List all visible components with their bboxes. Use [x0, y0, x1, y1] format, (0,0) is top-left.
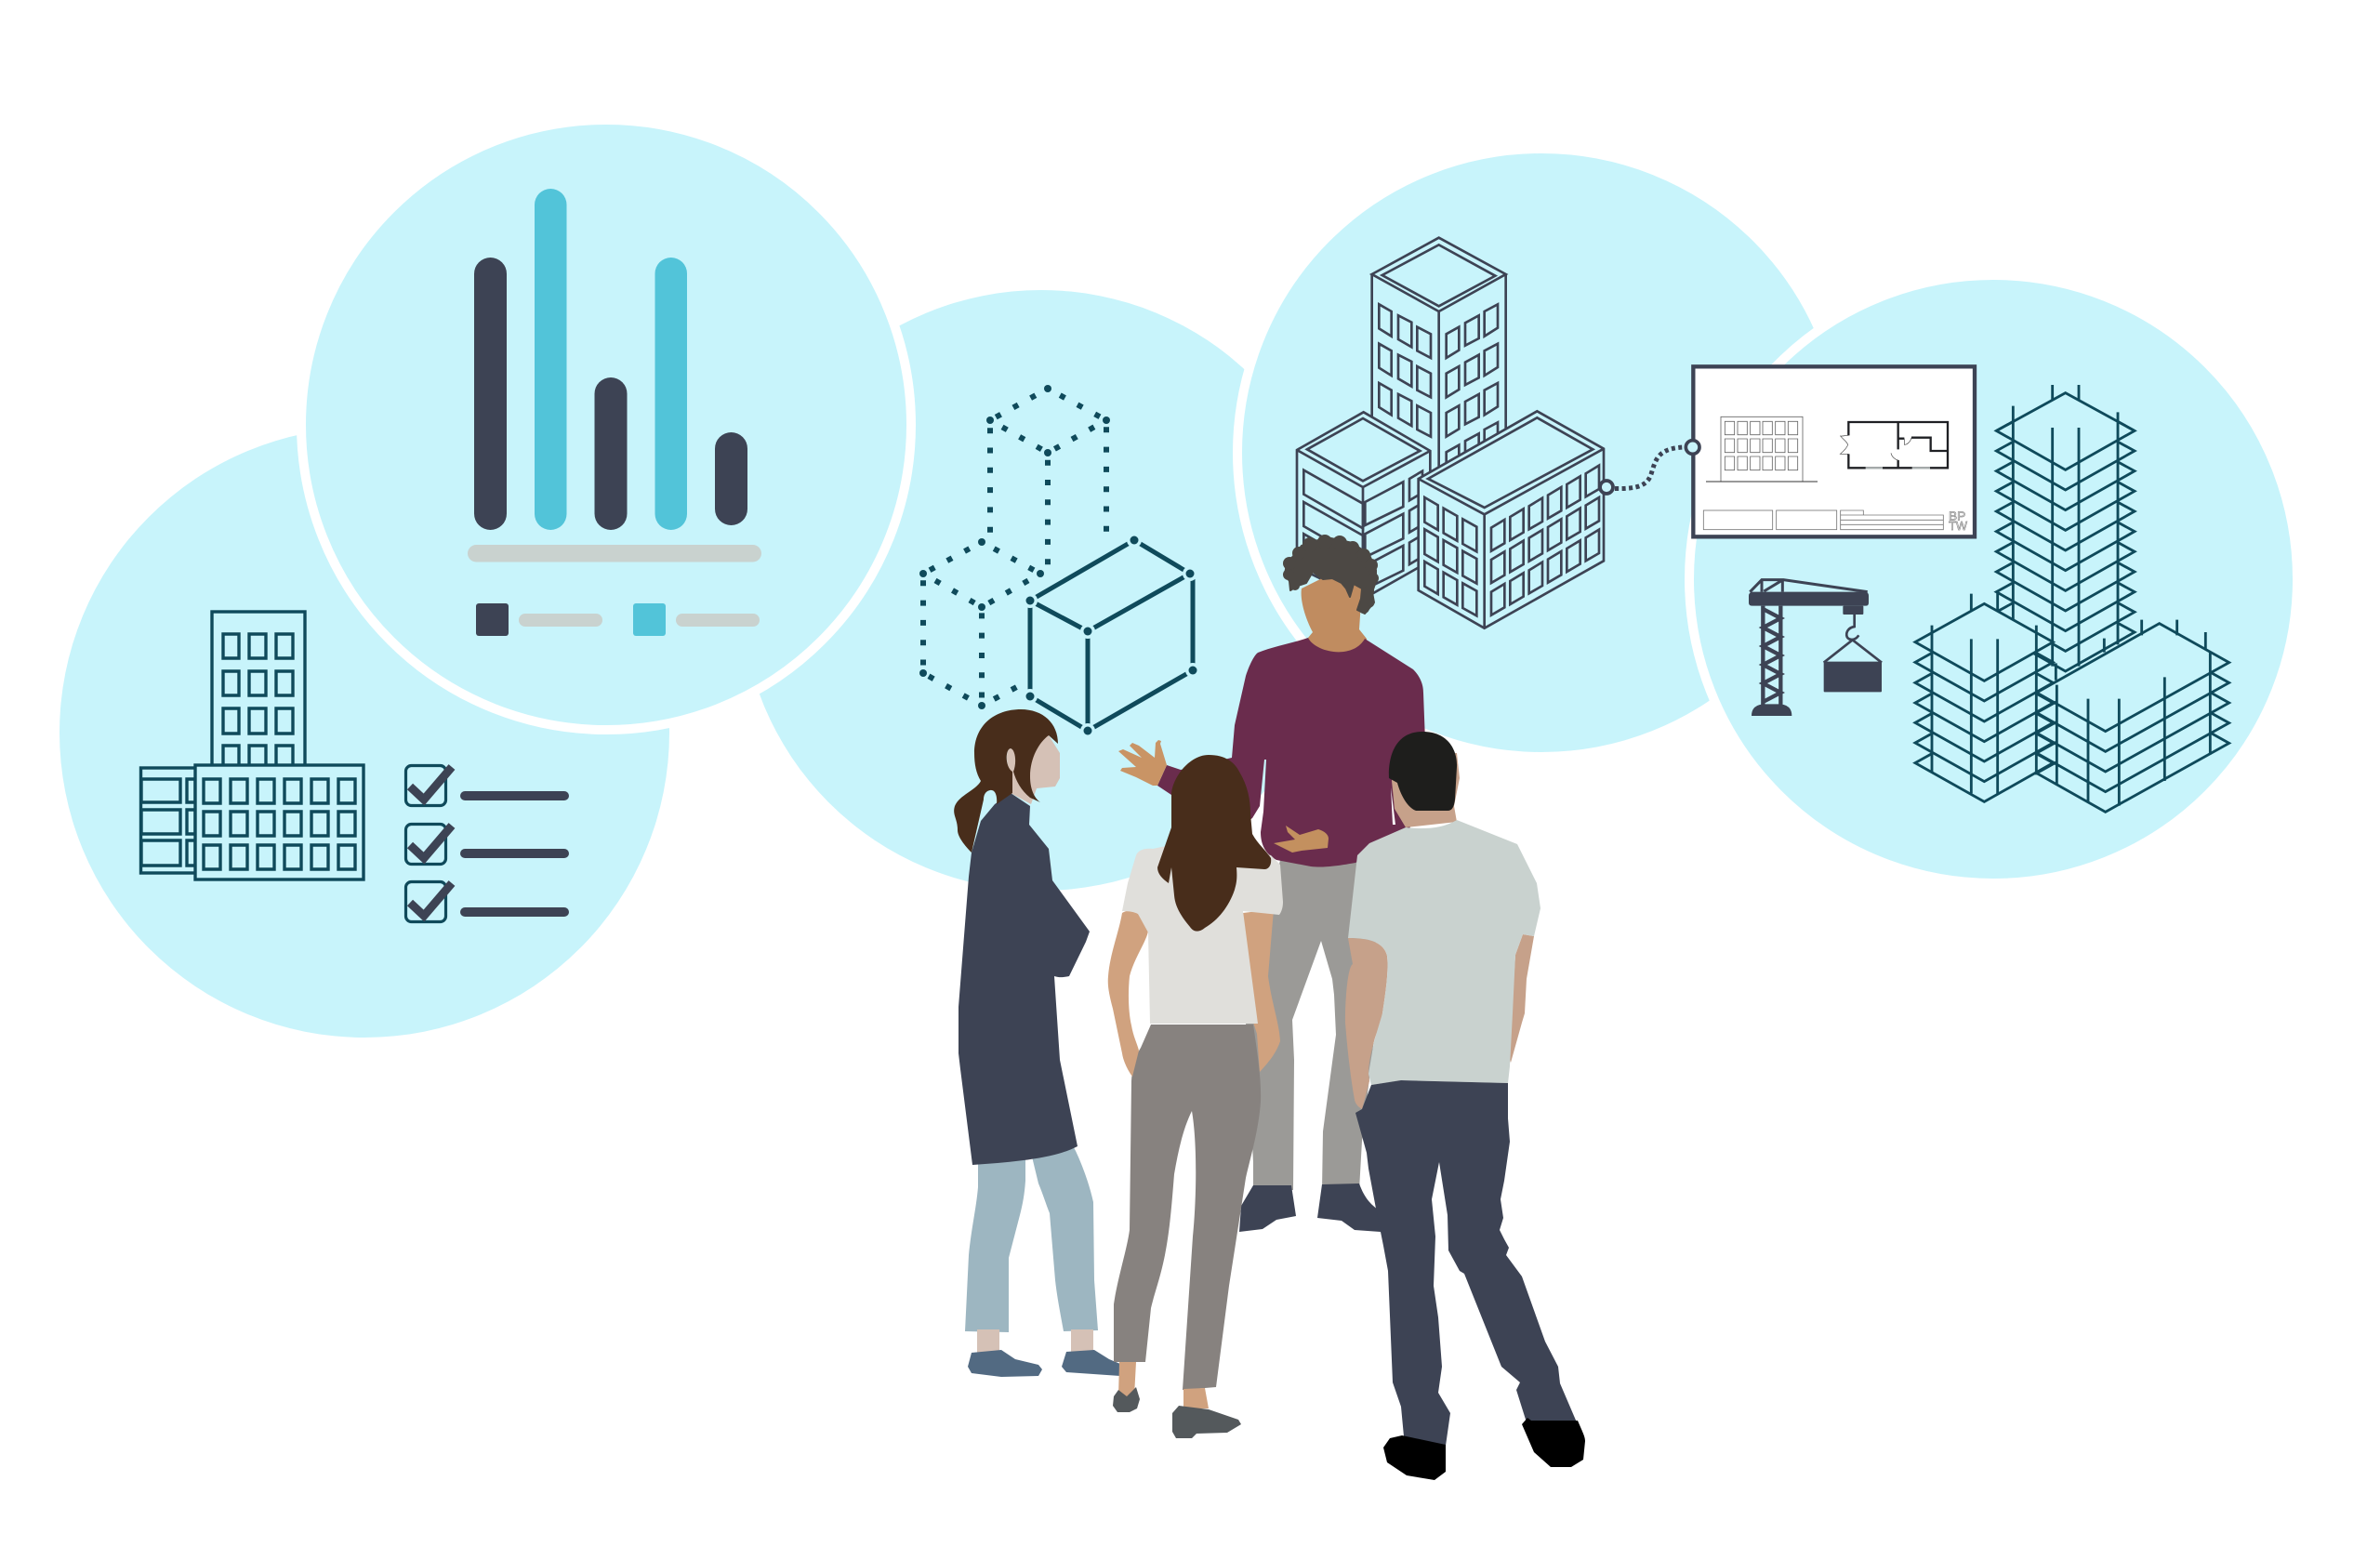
crane top truss — [1750, 580, 1868, 592]
resting hand — [1274, 826, 1329, 853]
shoes — [1113, 1387, 1241, 1438]
panel: construction circle — [1689, 275, 2297, 883]
crane mast — [1763, 606, 1780, 705]
rebar right block — [2037, 620, 2229, 812]
chart bars — [474, 189, 747, 530]
person: woman in white top — [1108, 755, 1283, 1438]
coat — [959, 793, 1090, 1165]
icon: isometric building cluster — [1297, 238, 1604, 628]
pointing hand — [1118, 740, 1167, 786]
head and neck — [1392, 753, 1460, 827]
shoes — [1239, 1183, 1381, 1232]
drawing sheet — [1686, 366, 1975, 536]
floor plan — [1840, 422, 1948, 468]
dotted connector — [1600, 447, 1685, 494]
crane trolley — [1843, 606, 1863, 615]
crane jib — [1749, 592, 1869, 606]
crane load — [1824, 662, 1882, 692]
arms — [1108, 909, 1280, 1077]
sheet frame — [1693, 366, 1975, 536]
t-shirt — [1348, 820, 1540, 1085]
person: man in grey t-shirt — [1345, 732, 1585, 1480]
person: man in purple sweater — [1118, 535, 1427, 1232]
crane hook and sling — [1824, 615, 1882, 663]
chart legend — [476, 603, 760, 636]
icon: checklist — [405, 766, 569, 922]
person: woman in navy coat — [954, 709, 1120, 1377]
chart baseline — [468, 545, 761, 562]
icon: solid cube — [1026, 536, 1197, 734]
bar chart — [468, 189, 761, 636]
ankles — [1118, 1362, 1209, 1408]
rebar left block — [1915, 594, 2053, 801]
face and neck — [1007, 735, 1060, 804]
icon: office buildings outline — [141, 612, 364, 879]
arms — [1345, 934, 1534, 1109]
trousers — [1246, 860, 1376, 1190]
icon: dotted cube outlines — [919, 385, 1110, 709]
shoes — [1383, 1418, 1585, 1480]
rebar tower — [1996, 385, 2135, 671]
short hair — [1389, 732, 1457, 811]
jeans — [1355, 1080, 1577, 1446]
panel: building cluster circle — [1237, 149, 1845, 757]
sheet logo: TW — [1949, 519, 1967, 533]
panel: bar chart circle — [301, 120, 911, 730]
wide building, front — [1419, 411, 1604, 628]
trousers — [1114, 1025, 1261, 1390]
long hair — [1157, 755, 1271, 932]
ankles — [977, 1329, 1093, 1354]
shoes — [968, 1350, 1120, 1377]
white sliver at ear — [1391, 787, 1395, 825]
building elevation — [1706, 416, 1818, 482]
sheet logo: BP — [1949, 509, 1965, 522]
top — [1122, 837, 1283, 1024]
sweater — [1157, 638, 1427, 867]
tall tower — [1372, 238, 1506, 476]
sheet logo — [1949, 509, 1967, 533]
jeans — [965, 1139, 1098, 1332]
panel: digital model circle — [741, 290, 1342, 891]
panel: checklist circle — [60, 428, 669, 1038]
low building, left — [1297, 412, 1430, 599]
icon: rebar building frames — [1915, 385, 2229, 812]
head and neck — [1302, 570, 1367, 662]
hair and ponytail — [954, 709, 1058, 853]
icon: tower crane — [1749, 580, 1882, 716]
title block — [1703, 510, 1943, 530]
crane base — [1752, 704, 1792, 716]
curly hair — [1283, 535, 1379, 614]
connector node — [1686, 441, 1699, 454]
